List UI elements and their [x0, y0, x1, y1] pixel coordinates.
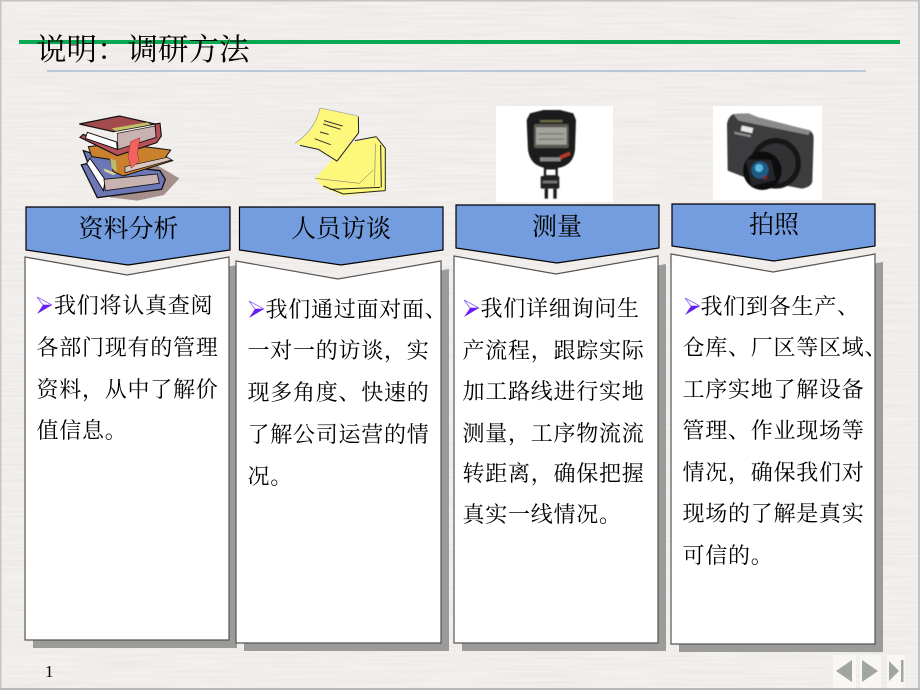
title: 说明：调研方法 — [36, 33, 250, 67]
body text — [36, 293, 219, 443]
icon: stack of books — [79, 116, 179, 201]
body text: 可信的。 — [682, 543, 774, 568]
body text: 现多角度、快速的 — [248, 380, 430, 405]
body text: 工序实地了解设备 — [682, 377, 865, 402]
panel: 资料分析 — [25, 207, 237, 648]
bullet arrow — [249, 301, 264, 318]
icon: camera photo — [713, 106, 822, 200]
body text: 产流程，跟踪实际 — [462, 338, 645, 364]
bullet arrow — [464, 300, 479, 317]
header: 拍照 — [672, 204, 875, 261]
body text: 现场的了解是真实 — [682, 501, 865, 526]
body text: 资料，从中了解价 — [36, 377, 219, 403]
body text: 我们通过面对面、 — [266, 297, 448, 322]
header: 拍照: 拍照 — [749, 211, 800, 239]
body text: 测量，工序物流流 — [462, 421, 645, 447]
blue header rule — [47, 70, 866, 72]
bullet arrow — [685, 298, 700, 315]
panel: 测量 — [454, 205, 666, 651]
body text: 我们将认真查阅 — [54, 293, 213, 318]
body text: 真实一线情况。 — [462, 502, 622, 527]
body text: 加工路线进行实地 — [462, 379, 645, 404]
body text: 仓库、厂区等区域、 — [682, 335, 887, 360]
navigation arrows — [833, 655, 905, 688]
body text: 了解公司运营的情 — [248, 422, 430, 447]
body text: 值信息。 — [36, 418, 128, 443]
page number: 1 — [45, 662, 54, 681]
body text: 情况，确保我们对 — [682, 460, 865, 486]
body text — [248, 297, 448, 489]
body text: 管理、作业现场等 — [682, 418, 865, 443]
body text — [462, 296, 645, 527]
icon: stopwatch photo — [496, 106, 613, 202]
header: 资料分析: 资料分析 — [78, 215, 179, 243]
header: 资料分析 — [26, 207, 230, 265]
header: 人员访谈 — [240, 207, 443, 265]
icon: previous — [833, 655, 856, 688]
icon: last — [887, 655, 905, 688]
body text: 我们详细询问生 — [480, 296, 640, 321]
panel: 人员访谈 — [236, 207, 449, 651]
header: 测量 — [456, 205, 659, 263]
body text: 我们到各生产、 — [700, 294, 860, 319]
header: 人员访谈: 人员访谈 — [291, 215, 391, 243]
icon: next — [860, 655, 881, 688]
body text: 况。 — [248, 464, 293, 489]
header: 测量: 测量 — [532, 213, 582, 241]
body text — [682, 294, 887, 568]
body text: 一对一的访谈，实 — [248, 338, 430, 364]
green header rule — [19, 40, 900, 44]
icon: yellow notes — [295, 108, 386, 196]
panel: 拍照 — [671, 204, 887, 652]
body text: 各部门现有的管理 — [36, 335, 219, 360]
bullet arrow — [37, 297, 52, 314]
body text: 转距离，确保把握 — [462, 461, 645, 487]
